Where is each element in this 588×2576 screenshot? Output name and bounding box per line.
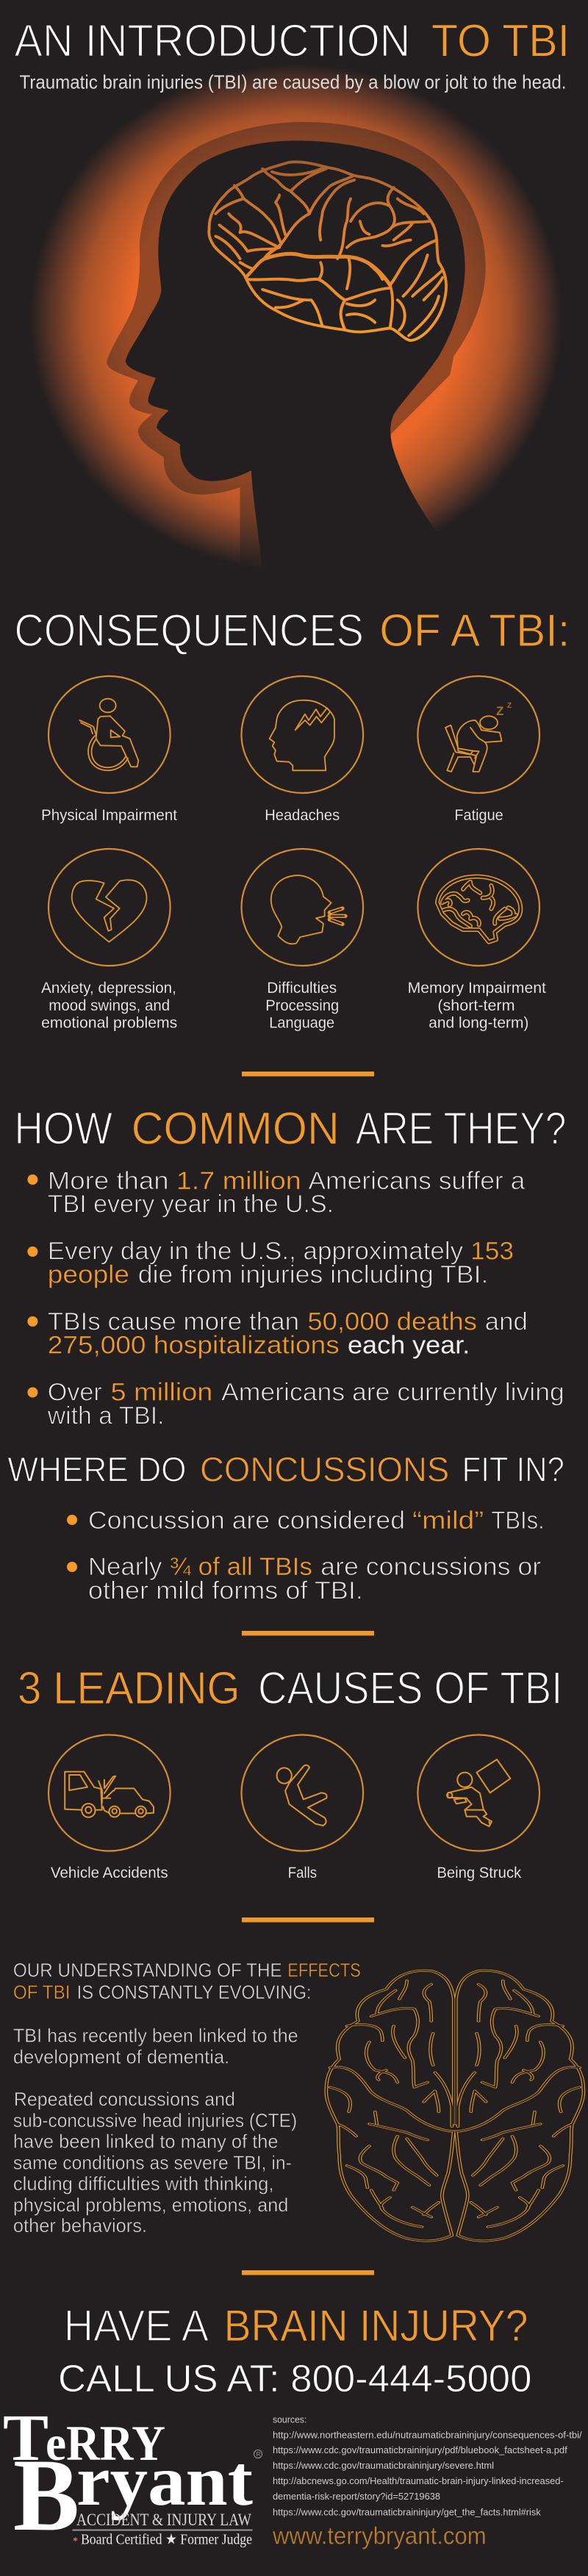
panel: leading causes (18, 1663, 562, 1881)
bullet: 1.7 million: TBI every year in the U.S. (48, 1191, 334, 1219)
head shadow (107, 122, 486, 562)
bullet: 153 people: Every day in the U.S., approximately (48, 1238, 463, 1266)
bullet: 153 people (27, 1238, 514, 1289)
label: difficulties processing language (265, 980, 339, 1032)
panel: where do concussions fit in (7, 1450, 564, 1605)
panel: consequences of a TBI (14, 606, 570, 1032)
bullet: 1.7 million: 1.7 million (176, 1167, 301, 1195)
heading: concussions: FIT IN? (462, 1450, 564, 1489)
logo: Terry Bryant: * (73, 2536, 78, 2547)
bullet: deaths and hospitalizations: TBIs cause more than (48, 1308, 299, 1336)
bullet: 5 million: Americans are currently living (221, 1379, 564, 1407)
heading: effects of TBI: EFFECTS (287, 1959, 361, 1981)
text: phone number: CALL US AT: 800-444-5000 (58, 2358, 531, 2400)
text: repeated concussions: sub-concussive head injuries (CTE) (13, 2109, 297, 2131)
text: repeated concussions: same conditions as severe TBI, in- (13, 2152, 292, 2174)
sources list (273, 2414, 582, 2518)
text: repeated concussions (13, 2088, 297, 2236)
bullet: 153 people: 153 (470, 1238, 514, 1266)
heading: 3 leading causes: 3 LEADING (18, 1663, 240, 1714)
bullet: deaths and hospitalizations (27, 1308, 528, 1360)
sources list: https://www.cdc.gov/traumaticbraininjury/get_the_facts.html#risk (273, 2506, 541, 2518)
bullet: deaths and hospitalizations: 275,000 hospitalizations (48, 1332, 340, 1360)
head silhouette with shadow and brain (107, 122, 486, 574)
icon: being struck (417, 1734, 539, 1851)
icon: memory brain (417, 849, 539, 966)
bullet: three quarters: Nearly (88, 1553, 162, 1581)
label: headaches: Headaches (265, 807, 340, 824)
bullet: deaths and hospitalizations: and (485, 1308, 528, 1336)
label: difficulties processing language: Language (269, 1015, 334, 1032)
bullet: 153 people: people (48, 1261, 129, 1289)
label: emotional problems: emotional problems (41, 1015, 177, 1032)
heading: effects of TBI (13, 1959, 361, 2003)
icon: fatigue: Z (507, 702, 512, 710)
bullet: mild: Concussion are considered (88, 1507, 405, 1535)
label: vehicle accidents: Vehicle Accidents (51, 1865, 168, 1881)
sources list: https://www.cdc.gov/traumaticbraininjury/severe.html (273, 2460, 494, 2471)
bullet: mild: TBIs. (491, 1507, 545, 1535)
logo: Terry Bryant: ryant (76, 2442, 253, 2521)
text: repeated concussions: Repeated concussions and (14, 2088, 235, 2110)
label: falls: Falls (288, 1865, 317, 1881)
label: difficulties processing language: Processing (265, 997, 339, 1014)
orange radial glow (30, 64, 562, 571)
bullet: 1.7 million: More than (48, 1167, 169, 1195)
label: memory impairment (408, 980, 546, 1032)
website url: www.terrybryant.com (272, 2522, 487, 2550)
sources list: dementia-risk-report/story?id=52719638 (273, 2491, 440, 2502)
label: difficulties processing language: Difficulties (267, 980, 337, 997)
heading: consequences: OF A TBI: (379, 606, 570, 656)
label: being struck: Being Struck (437, 1865, 522, 1881)
bullet: 5 million: Over (48, 1379, 102, 1407)
bullet: 5 million: 5 million (110, 1379, 212, 1407)
icon: fatigue: Z (496, 704, 503, 718)
bullet: 1.7 million (27, 1167, 525, 1219)
logo: Terry Bryant: B (13, 2438, 79, 2552)
icon: physical impairment (49, 676, 171, 793)
heading: consequences: CONSEQUENCES (14, 606, 364, 656)
heading: have a brain injury: BRAIN INJURY? (224, 2301, 528, 2350)
heading: have a brain injury (64, 2301, 528, 2350)
heading: effects of TBI: OUR UNDERSTANDING OF THE (13, 1959, 282, 1981)
text: dementia link (13, 2024, 298, 2067)
title: AN INTRODUCTION (14, 16, 410, 66)
brain illustration (209, 162, 446, 340)
label: emotional problems: mood swings, and (49, 997, 170, 1014)
bullet: three quarters: ¾ of all TBIs (170, 1553, 312, 1581)
logo: Terry Bryant: eRRY (46, 2415, 165, 2471)
text: repeated concussions: have been linked to many of the (13, 2131, 279, 2153)
bullet: 5 million: with a TBI. (47, 1402, 164, 1430)
icon: falls (241, 1734, 363, 1851)
icon: top-down brain (326, 1970, 584, 2241)
logo: Terry Bryant: T (3, 2402, 49, 2475)
text: dementia link: development of dementia. (13, 2045, 229, 2067)
sources list: http://abcnews.go.com/Health/traumatic-brain-injury-linked-increased- (273, 2475, 564, 2486)
bullet: mild (67, 1507, 545, 1535)
logo: Terry Bryant (3, 2402, 262, 2552)
heading: how common (14, 1104, 566, 1155)
heading: concussions: CONCUSSIONS (200, 1450, 449, 1489)
panel: introduction hero (14, 16, 570, 574)
text: repeated concussions: physical problems, emotions, and (13, 2194, 288, 2216)
bullet: mild: “mild” (412, 1507, 484, 1535)
logo: Terry Bryant: ACCIDENT & INJURY LAW (76, 2511, 251, 2529)
label: memory impairment: and long-term) (429, 1015, 528, 1032)
bullet: three quarters: other mild forms of TBI. (88, 1577, 363, 1605)
bullet: deaths and hospitalizations: each year. (348, 1332, 470, 1360)
label: emotional problems: Anxiety, depression, (41, 980, 176, 997)
label: physical impairment: Physical Impairment (41, 807, 177, 824)
heading: effects of TBI: OF TBI (13, 1981, 70, 2003)
bullet: 5 million (27, 1379, 564, 1430)
heading: have a brain injury: HAVE A (64, 2301, 209, 2350)
label: fatigue: Fatigue (454, 807, 503, 824)
text: repeated concussions: cluding difficulties with thinking, (13, 2173, 274, 2195)
text: repeated concussions: other behaviors. (13, 2214, 147, 2236)
icon: headaches (241, 676, 363, 793)
title: TO TBI (431, 16, 570, 66)
heading: how common: COMMON (132, 1104, 340, 1155)
heading: concussions: WHERE DO (7, 1450, 187, 1489)
icon: speaking head (241, 849, 363, 966)
panel: call to action (58, 2301, 531, 2400)
heading: 3 leading causes (18, 1663, 562, 1714)
bullet: deaths and hospitalizations: 50,000 deaths (307, 1308, 477, 1336)
panel: how common are they (14, 1104, 566, 1430)
label: emotional problems (41, 980, 177, 1032)
sources list: https://www.cdc.gov/traumaticbraininjury/pdf/bluebook_factsheet-a.pdf (273, 2444, 567, 2455)
icon: broken heart (49, 849, 171, 966)
heading: concussions (7, 1450, 564, 1489)
sources list: http://www.northeastern.edu/nutraumaticbraininjury/consequences-of-tbi/ (273, 2429, 582, 2440)
bullet: three quarters: are concussions or (320, 1553, 541, 1581)
bullet: three quarters (67, 1553, 541, 1605)
bullet: 1.7 million: Americans suffer a (308, 1167, 525, 1195)
heading: consequences (14, 606, 570, 656)
icon: fatigue (417, 676, 539, 793)
logo: Terry Bryant: Board Certified ★ Former Judge (81, 2532, 252, 2548)
heading: effects of TBI: IS CONSTANTLY EVOLVING: (77, 1981, 311, 2003)
logo: Terry Bryant: R (256, 2451, 260, 2458)
panel: evolving understanding (13, 1959, 584, 2241)
heading: how common: HOW (14, 1104, 113, 1155)
sources list: sources: (273, 2414, 306, 2425)
label: memory impairment: (short-term (437, 997, 514, 1014)
head silhouette (126, 140, 465, 574)
bullet: 153 people: die from injuries including TBI. (138, 1261, 488, 1289)
label: memory impairment: Memory Impairment (408, 980, 546, 997)
text: dementia link: TBI has recently been linked to the (13, 2024, 298, 2046)
icon: vehicle accident (49, 1734, 171, 1851)
